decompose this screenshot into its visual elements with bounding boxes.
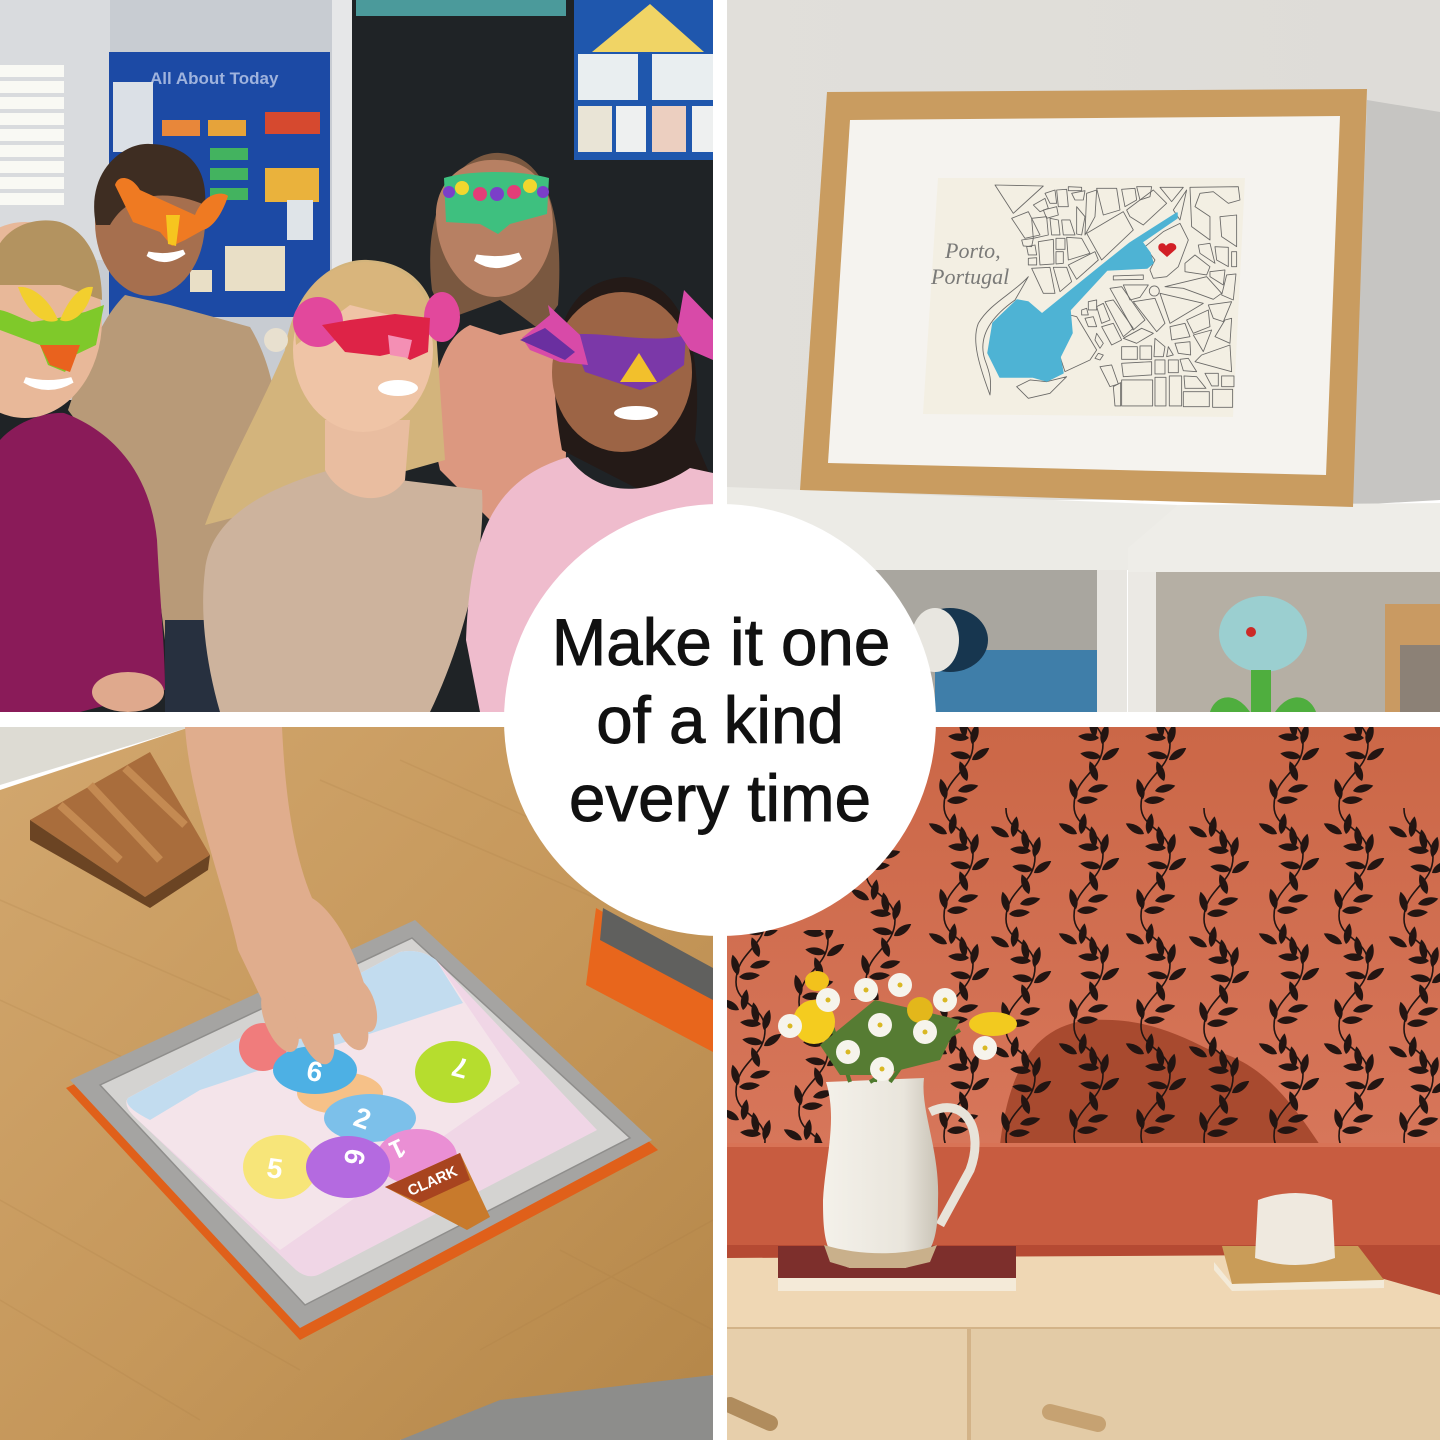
ice cream scoops: 1 bbox=[385, 1132, 410, 1166]
child: right in pink shirt bbox=[466, 277, 713, 712]
map caption: Porto, bbox=[944, 238, 1001, 263]
map street blocks bbox=[976, 185, 1240, 407]
centre circle with headline bbox=[504, 504, 936, 936]
poster: house chart bbox=[574, 0, 713, 160]
wood grain bbox=[0, 760, 713, 1420]
white jug bbox=[823, 1078, 975, 1268]
ice cream scoops: 6 bbox=[304, 1055, 325, 1088]
red book bbox=[778, 1246, 1016, 1291]
coral wall bbox=[727, 727, 1440, 1147]
wall bbox=[727, 0, 1440, 500]
metal tray bbox=[66, 920, 658, 1340]
child's arm and hand bbox=[185, 727, 383, 1069]
sideboard bbox=[727, 1255, 1440, 1440]
shelf unit bbox=[727, 487, 1440, 712]
map print bbox=[923, 178, 1245, 417]
flower bouquet bbox=[778, 971, 1017, 1082]
wooden table bbox=[0, 727, 713, 1440]
ice cream scoops: 5 bbox=[265, 1152, 285, 1185]
game board bbox=[126, 951, 597, 1276]
frame shadow bbox=[1352, 100, 1440, 505]
orange box bbox=[586, 908, 713, 1052]
child: left in magenta shirt bbox=[0, 220, 165, 712]
map print: Portugal bbox=[930, 264, 1009, 289]
white mat bbox=[828, 116, 1340, 475]
wooden frame bbox=[800, 89, 1367, 507]
poster: all about today: All About Today bbox=[150, 69, 279, 88]
panel: vine wallpaper with vase on sideboard bbox=[727, 727, 1440, 1440]
headline: of a kind bbox=[596, 684, 844, 757]
ice cream scoops: 6 bbox=[338, 1147, 371, 1167]
map river bbox=[988, 213, 1177, 381]
headline: every time bbox=[569, 762, 871, 835]
headline: Make it one bbox=[552, 606, 890, 679]
shadow on wall bbox=[1000, 1020, 1320, 1145]
vine wallpaper pattern bbox=[719, 613, 1440, 1270]
cutting board bbox=[30, 752, 210, 908]
headline bbox=[552, 606, 890, 835]
child: back left in tan shirt bbox=[68, 144, 277, 712]
classroom background bbox=[0, 0, 713, 712]
poster: all about today bbox=[109, 0, 352, 317]
child: centre in beige cardigan bbox=[203, 260, 482, 712]
ice cream scoops: 2 bbox=[350, 1101, 375, 1136]
stack with ceramic cup bbox=[1214, 1193, 1384, 1291]
panel: child placing ice cream game pieces on tray bbox=[0, 727, 713, 1440]
ice cream scoops: CLARK bbox=[405, 1163, 460, 1200]
ice cream scoops bbox=[239, 1023, 491, 1230]
panel: framed Porto map on shelf bbox=[727, 0, 1440, 712]
child: back right in salmon shirt bbox=[427, 153, 568, 520]
wooden flower toy bbox=[1210, 596, 1440, 712]
panel: children in classroom wearing masks bbox=[0, 0, 713, 712]
background floor and wall bbox=[0, 727, 713, 1440]
ice cream scoops: 7 bbox=[449, 1051, 472, 1085]
heart marker bbox=[1158, 243, 1176, 257]
wainscot bbox=[727, 1143, 1440, 1300]
